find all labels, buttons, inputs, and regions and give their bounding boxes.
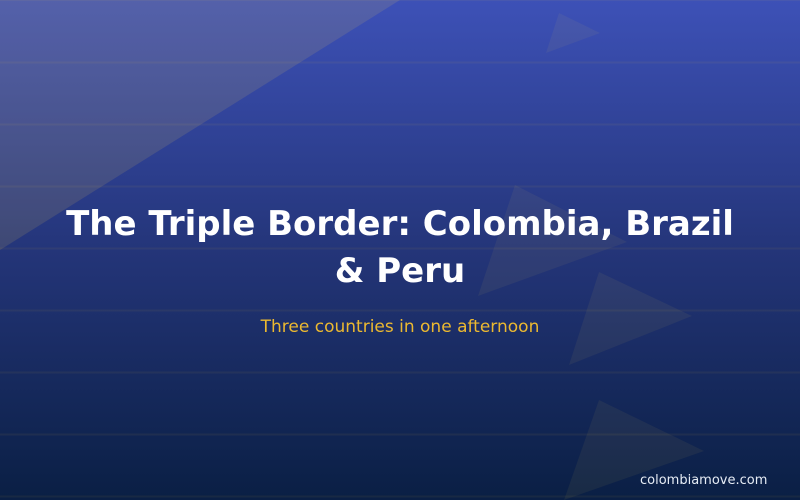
triangle behind title xyxy=(478,185,627,296)
title: The Triple Border: Colombia, Brazil & Peru xyxy=(66,204,734,291)
triangle bottom right xyxy=(564,400,704,500)
corner triangle xyxy=(0,0,400,250)
triangle middle right xyxy=(569,272,692,365)
small triangle top right xyxy=(546,13,600,53)
subtitle: Three countries in one afternoon xyxy=(261,317,539,337)
website credit: colombiamove.com xyxy=(640,473,767,488)
